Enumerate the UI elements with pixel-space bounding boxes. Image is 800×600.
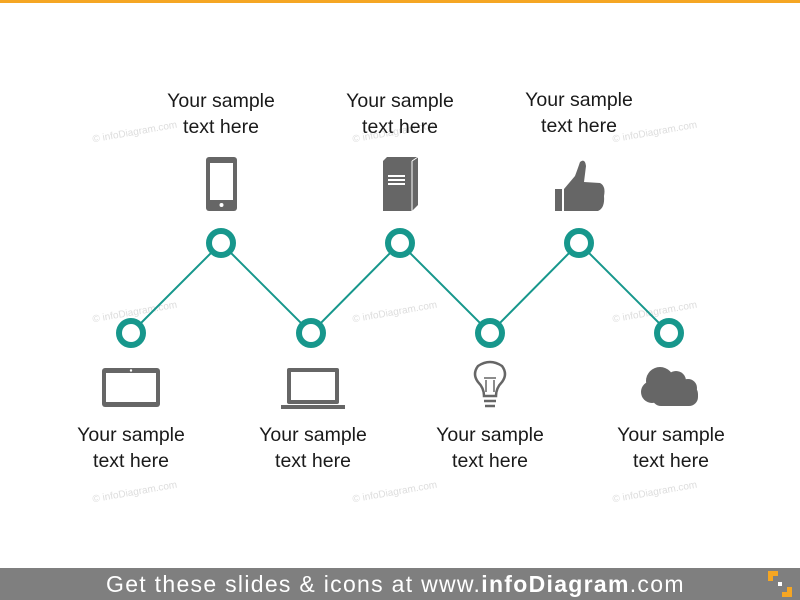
text: text here <box>541 115 617 137</box>
labels bottom <box>77 424 185 472</box>
footer logo <box>768 571 792 597</box>
text: text here <box>275 450 351 472</box>
text: Your sample <box>259 424 367 446</box>
text: © infoDiagram.com <box>612 300 698 325</box>
labels top: text here <box>183 116 259 138</box>
labels bottom: Your sample <box>77 424 185 446</box>
text: Your sample <box>617 424 725 446</box>
icon: cloud <box>641 367 698 406</box>
text: © infoDiagram.com <box>612 480 698 505</box>
text: text here <box>452 450 528 472</box>
icon: phone <box>206 157 237 211</box>
text: © infoDiagram.com <box>92 120 178 145</box>
icon: laptop <box>281 368 345 409</box>
text: text here <box>633 450 709 472</box>
text: © infoDiagram.com <box>92 480 178 505</box>
footer bar: Get these slides & icons at www.infoDiagram.com <box>106 571 685 597</box>
icon: thumbs up <box>555 161 604 211</box>
footer bar <box>0 568 800 600</box>
icon: tablet <box>102 368 160 407</box>
text: © infoDiagram.com <box>352 480 438 505</box>
labels bottom: text here <box>93 450 169 472</box>
text: text here <box>362 116 438 138</box>
icon: server <box>383 157 418 211</box>
text: © infoDiagram.com <box>352 300 438 325</box>
top orange line <box>0 0 800 3</box>
text: © infoDiagram.com <box>612 120 698 145</box>
text: © infoDiagram.com <box>352 120 438 145</box>
text: © infoDiagram.com <box>92 300 178 325</box>
labels top: Your sample <box>167 90 275 112</box>
icon: light bulb <box>475 362 505 406</box>
text: Your sample <box>525 89 633 111</box>
text: Your sample <box>436 424 544 446</box>
text: Your sample <box>346 90 454 112</box>
labels top <box>167 90 275 138</box>
